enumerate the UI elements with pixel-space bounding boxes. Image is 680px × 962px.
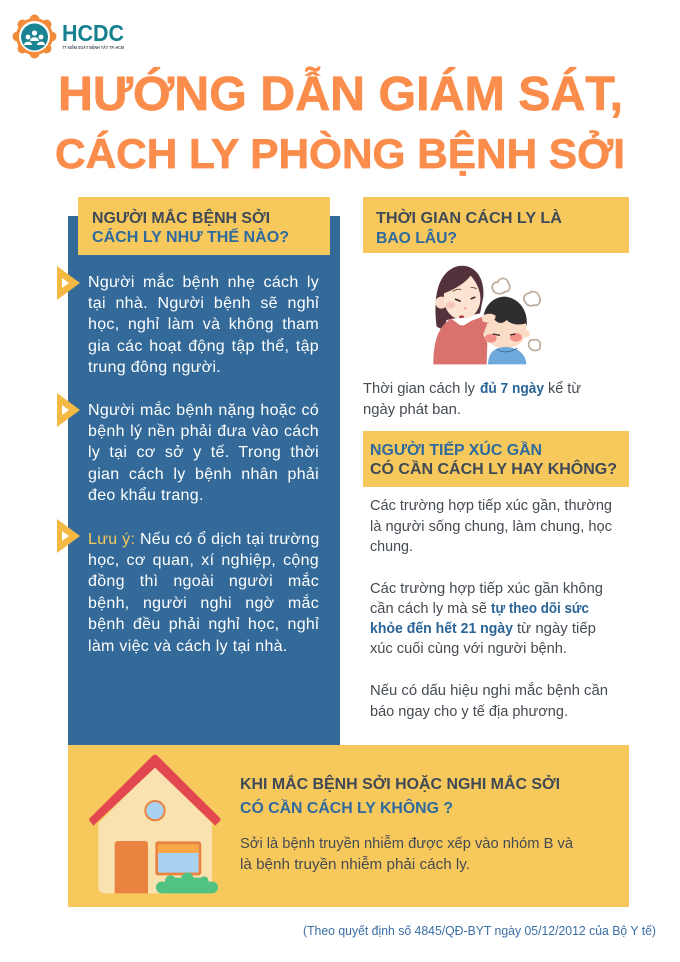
icon: bullet arrow 1 (57, 266, 80, 300)
text: close contacts definition: chung. (370, 539, 413, 555)
callout heading (240, 774, 560, 817)
heading box: close contacts: CÓ CẦN CÁCH LY HAY KHÔNG? (370, 459, 617, 478)
text: isolation duration (363, 381, 581, 418)
text: report symptoms: báo ngay cho y tế địa phương. (370, 704, 568, 720)
text: close contacts monitoring: tự theo dõi sức (491, 601, 589, 617)
text: bullet 1 (88, 273, 319, 376)
icon: bullet arrow 2 (57, 393, 80, 427)
logo: HCDC: HCDC (62, 20, 124, 46)
logo: HCDC: TT KIỂM SOÁT BỆNH TẬT TP. HCM (62, 43, 124, 50)
text: bullet 2: Người mắc bệnh nặng hoặc có (88, 402, 319, 419)
text: bullet 3 (88, 531, 320, 655)
heading box: isolation duration (363, 197, 629, 253)
text: bullet 1: tại nhà. Người bệnh sẽ nghỉ (88, 295, 319, 312)
heading box: close contacts: NGƯỜI TIẾP XÚC GẦN (370, 440, 542, 459)
heading box: close contacts (363, 431, 629, 487)
callout heading: CÓ CẦN CÁCH LY KHÔNG ? (240, 798, 453, 817)
callout text: Sởi là bệnh truyền nhiễm được xếp vào nhóm B và (240, 835, 574, 852)
heading box: isolation duration: BAO LÂU? (376, 228, 457, 247)
text: close contacts monitoring: khỏe đến hết 21 ngày (370, 621, 514, 637)
text: report symptoms: Nếu có dấu hiệu nghi mắc bệnh cần (370, 682, 608, 699)
text: bullet 3: Lưu ý: Nếu có ổ dịch tại trường (88, 531, 320, 548)
text: isolation duration: kể từ (548, 381, 581, 397)
text: isolation duration: Thời gian cách ly (363, 381, 476, 397)
text: close contacts definition: là người sống chung, làm chung, học (370, 519, 612, 535)
icon: bullet arrow 3 (57, 519, 80, 553)
text: bullet 2: gian cách ly bệnh nhân phải (88, 466, 319, 483)
text: bullet 3: đồng thì ngoài người mắc (88, 573, 319, 590)
text: bullet 1: Người mắc bệnh nhẹ cách ly (88, 274, 319, 291)
text: close contacts monitoring: xúc cuối cùng với người bệnh. (370, 641, 567, 657)
panel: blue background (68, 216, 340, 745)
illustration: house (89, 755, 220, 893)
text: bullet 3: làm việc và cách ly tại nhà. (88, 638, 288, 655)
title (55, 66, 625, 177)
title: HƯỚNG DẪN GIÁM SÁT, (58, 66, 623, 121)
text: bullet 2 (88, 401, 319, 504)
text: bullet 2: bệnh lý nền phải đưa vào cách (88, 423, 319, 440)
text: close contacts monitoring: Các trường hợp tiếp xúc gần không (370, 581, 603, 597)
text: close contacts monitoring: cần cách ly mà sẽ (370, 601, 487, 617)
text: bullet 1: học, nghỉ làm và không tham (88, 316, 319, 333)
panel: bottom callout (68, 745, 629, 907)
text: close contacts monitoring: từ ngày tiếp (517, 621, 596, 637)
text: close contacts definition: Các trường hợp tiếp xúc gần, thường (370, 498, 612, 514)
text: bullet 3: học, cơ quan, xí nghiệp, cộng (88, 552, 319, 569)
illustration: mother and sick child (433, 266, 540, 364)
text: bullet 1: gia các hoạt động tập thể, tập (88, 338, 319, 355)
text: close contacts definition (370, 498, 612, 555)
callout text: là bệnh truyền nhiễm phải cách ly. (240, 856, 470, 873)
text: bullet 2: đeo khẩu trang. (88, 487, 204, 504)
source note: (Theo quyết định số 4845/QĐ-BYT ngày 05/12/2012 của Bộ Y tế) (303, 923, 656, 938)
text: bullet 2: ly tại cơ sở y tế. Trong thời (88, 444, 319, 461)
callout heading: KHI MẮC BỆNH SỞI HOẶC NGHI MẮC SỞI (240, 774, 560, 793)
text: bullet 1: trung đông người. (88, 359, 221, 376)
heading box: how to isolate: CÁCH LY NHƯ THẾ NÀO? (92, 227, 289, 246)
heading box: how to isolate: NGƯỜI MẮC BỆNH SỞI (92, 208, 270, 227)
text: isolation duration: ngày phát ban. (363, 402, 461, 418)
heading box: isolation duration: THỜI GIAN CÁCH LY LÀ (376, 208, 562, 227)
logo: HCDC (12, 14, 124, 58)
text: close contacts monitoring (370, 581, 603, 657)
text: bullet 3: bệnh, người nghi ngờ mắc (88, 595, 319, 612)
callout text (240, 835, 574, 873)
heading box: how to isolate (78, 197, 330, 255)
text: bullet 3: bệnh đều phải nghỉ học, nghỉ (88, 616, 319, 633)
text: report symptoms (370, 682, 608, 720)
title: CÁCH LY PHÒNG BỆNH SỞI (55, 129, 625, 177)
text: isolation duration: đủ 7 ngày (480, 381, 545, 397)
